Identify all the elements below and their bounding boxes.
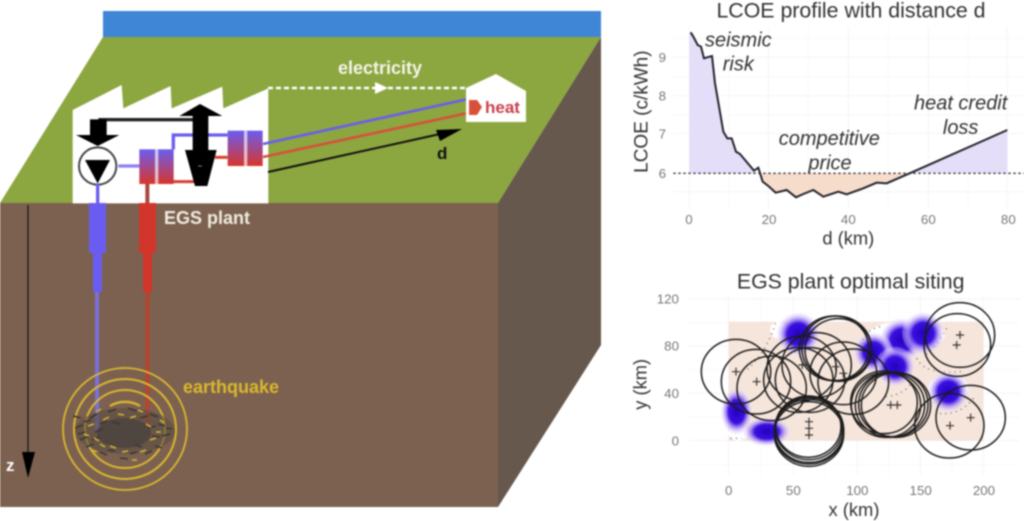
turbine: ~ (198, 161, 202, 170)
turbine (185, 150, 217, 186)
purple seismic risk area (689, 32, 757, 173)
x axis tick labels: 50 (786, 483, 801, 498)
annotation: seismic risk: seismic (705, 30, 772, 52)
x axis tick labels: 0 (725, 483, 732, 498)
panel: EGS plant optimal siting map (630, 270, 1020, 520)
x axis tick labels: 60 (921, 212, 936, 227)
annotation: seismic risk: risk (723, 54, 755, 76)
underground side face (498, 37, 601, 507)
production well (139, 203, 156, 432)
threshold dotted line (673, 171, 1024, 175)
factory EGS plant (73, 85, 268, 203)
panel: EGS block diagram (0, 11, 601, 507)
grid lines (688, 297, 1020, 475)
y axis tick labels: 7 (659, 127, 666, 142)
x axis title: d (km) (822, 227, 874, 248)
injection well (89, 203, 106, 432)
depth axis z: z (6, 456, 14, 475)
y axis title: LCOE (c/kWh) (631, 50, 652, 173)
pump power line (98, 118, 195, 121)
underground front face (0, 203, 498, 507)
annotation: competitive price (779, 128, 880, 175)
x axis tick labels: 100 (846, 483, 868, 498)
y axis tick labels: 40 (664, 386, 679, 401)
x axis title: x (km) (829, 499, 879, 520)
y axis tick labels: 8 (659, 89, 666, 104)
y axis title: y (km) (630, 359, 651, 410)
house (466, 74, 526, 122)
heat pipes to house (263, 99, 468, 157)
distance arrow d (268, 129, 462, 172)
surface top face (0, 37, 601, 203)
y axis tick labels (659, 50, 666, 181)
annotation: heat credit loss: heat credit (914, 93, 1009, 115)
earthquake rings and cloud (63, 368, 187, 490)
x axis tick labels: 20 (762, 212, 776, 227)
x axis tick labels: 80 (1001, 212, 1016, 227)
panel: LCOE profile chart (631, 0, 1024, 248)
chart title: EGS plant optimal siting (737, 270, 964, 294)
dotted exclusion arcs (731, 323, 973, 438)
depth axis z (6, 205, 35, 478)
y axis tick labels: 120 (657, 292, 679, 307)
y axis tick labels: 0 (672, 433, 679, 448)
suitable area (729, 322, 983, 441)
annotation: heat credit loss (914, 93, 1009, 139)
plant location crosses (732, 331, 975, 439)
purple heat credit area (913, 130, 1007, 173)
x axis tick labels: 40 (841, 212, 856, 227)
x axis tick labels: 200 (973, 483, 995, 498)
exclusion halos (728, 321, 968, 441)
electricity label: electricity (338, 58, 422, 78)
hot loop pipes (147, 157, 228, 203)
annotation: competitive price: competitive (779, 128, 880, 150)
electricity up arrow (179, 104, 222, 152)
pump arrow (76, 119, 119, 146)
y axis tick labels: 9 (659, 50, 666, 65)
x axis tick labels: 0 (685, 212, 693, 227)
y axis tick labels: 80 (664, 339, 679, 354)
electricity dashed arrow (268, 82, 466, 94)
y axis tick labels: 6 (659, 166, 666, 181)
x axis tick labels (685, 212, 1016, 227)
orange competitive price area (760, 173, 907, 197)
house: heat (485, 98, 520, 117)
heat exchanger 2 (228, 131, 263, 166)
plant range circles (701, 303, 1005, 466)
annotation: competitive price: price (807, 153, 852, 175)
x axis tick labels (725, 483, 995, 498)
distance arrow d: d (437, 144, 447, 163)
annotation: heat credit loss: loss (943, 117, 978, 139)
factory building (73, 85, 268, 203)
y axis tick labels (657, 292, 679, 448)
water strip (103, 11, 601, 37)
induced seismicity hot spots (721, 312, 969, 446)
cold loop pipes (98, 135, 228, 203)
heat exchanger 1 (139, 149, 174, 184)
earthquake label: earthquake (183, 377, 279, 397)
LCOE curve (691, 32, 1007, 197)
annotation: seismic risk (705, 30, 772, 76)
x axis tick labels: 150 (910, 483, 932, 498)
grid lines (673, 27, 1023, 208)
EGS plant label: EGS plant (164, 208, 250, 228)
pump symbol (79, 147, 116, 185)
